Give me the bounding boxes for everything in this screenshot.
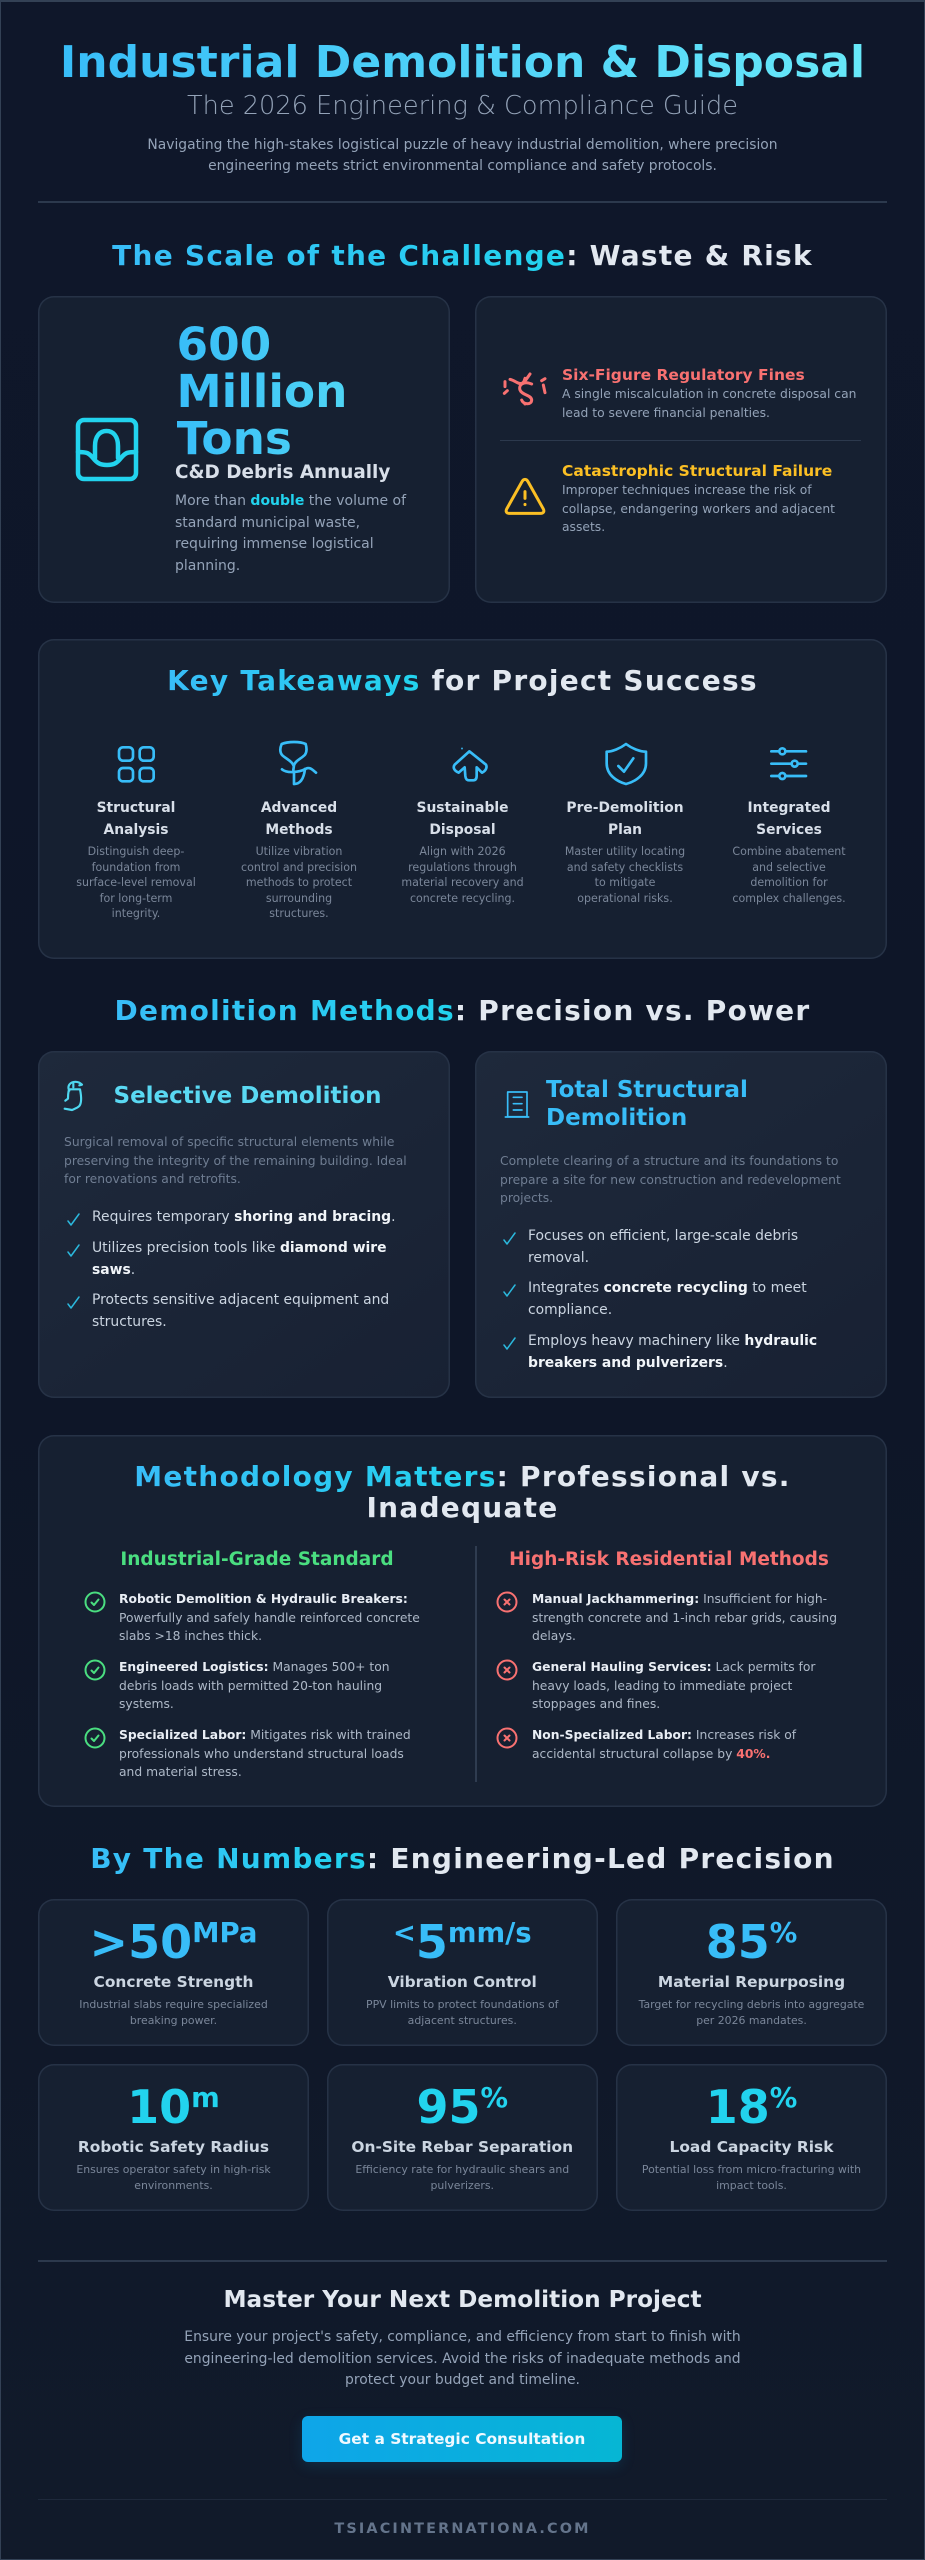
takeaway: advanced methods: control and precision [241, 861, 357, 874]
takeaway: structural analysis [76, 800, 196, 920]
takeaway: integrated services: demolition for [750, 876, 828, 889]
big number: Tons [176, 412, 292, 464]
icon: advanced tool [278, 740, 318, 786]
panel: debris statistic [38, 296, 450, 603]
takeaway: pre-demolition plan: to mitigate [595, 876, 655, 889]
big number: 600 [176, 318, 271, 370]
check list: total: removal. [528, 1250, 589, 1266]
comparison: engineered logistics [84, 1660, 390, 1711]
stat note: adjacent structures. [408, 2014, 517, 2026]
risk: regulatory fines: Six-Figure Regulatory Fines [562, 366, 805, 384]
check list: total: Integrates concrete recycling to meet [528, 1280, 807, 1296]
comparison: manual jackhammering: Manual Jackhammering: Insufficient for high- [532, 1592, 827, 1606]
method description: total: prepare a site for new construction and redevelopment [500, 1172, 841, 1186]
method description: selective: preserving the integrity of the remaining building. Ideal [64, 1154, 407, 1168]
stat note [616, 2162, 887, 2193]
stat name: Load Capacity Risk [670, 2138, 833, 2156]
method description: selective: for renovations and retrofits. [64, 1172, 241, 1186]
stat value: <5mm/s [393, 1915, 532, 1969]
comparison: robotic demolition: Robotic Demolition & Hydraulic Breakers: [119, 1592, 408, 1606]
stat note: Ensures operator safety in high-risk [76, 2163, 271, 2176]
takeaway: sustainable disposal: regulations through [408, 861, 517, 874]
comparison: general hauling [496, 1660, 816, 1711]
icon: hand tool [64, 1080, 84, 1112]
stat note: pulverizers. [430, 2178, 494, 2192]
comparison: engineered logistics: Engineered Logistics: Manages 500+ ton [119, 1660, 390, 1674]
icon: sliders [770, 747, 808, 780]
stat card: rebar separation [327, 2064, 598, 2211]
comparison: robotic demolition: Powerfully and safely handle reinforced concrete [119, 1610, 420, 1624]
panel: total structural demolition [475, 1051, 887, 1398]
takeaway: pre-demolition plan [565, 800, 685, 905]
stat note: PPV limits to protect foundations of [366, 1998, 558, 2011]
takeaway: sustainable disposal [401, 800, 524, 905]
risk description: failure: assets. [562, 520, 605, 534]
stat value: 95% [416, 2080, 508, 2134]
method title: total [546, 1077, 748, 1131]
panel: selective demolition [38, 1051, 450, 1398]
takeaway: pre-demolition plan: Pre-Demolition [566, 800, 684, 816]
stat description: requiring immense logistical [175, 536, 374, 552]
takeaway: sustainable disposal: Disposal [429, 822, 496, 838]
stat description: More than double the volume of [175, 493, 406, 509]
panel: key takeaways [38, 639, 887, 959]
comparison: specialized labor: and material stress. [119, 1765, 242, 1779]
comparison: engineered logistics: systems. [119, 1697, 174, 1711]
risk description: fines [562, 387, 856, 420]
takeaway: sustainable disposal: concrete recycling. [410, 892, 515, 905]
stat note: environments. [134, 2178, 213, 2192]
takeaway: pre-demolition plan: Plan [608, 822, 642, 838]
comparison: non-specialized labor [496, 1728, 796, 1760]
intro text: Navigating the high-stakes logistical puzzle of heavy industrial demolition, where precision [147, 137, 778, 153]
intro text: engineering meets strict environmental compliance and safety protocols. [208, 158, 717, 174]
heading: methodology matters [134, 1460, 791, 1524]
stat value: 18% [706, 2080, 797, 2134]
check list: total: Employs heavy machinery like hydraulic [528, 1333, 817, 1349]
method description: selective [64, 1135, 407, 1186]
takeaway: pre-demolition plan: Master utility locating [565, 845, 685, 858]
call to action text: engineering-led demolition services. Avoid the risks of inadequate methods and [184, 2351, 741, 2367]
takeaway: pre-demolition plan: operational risks. [577, 892, 673, 905]
comparison: manual jackhammering [496, 1592, 837, 1643]
stat note [79, 1998, 268, 2026]
check list: selective: Requires temporary shoring and bracing. [92, 1209, 396, 1225]
panel: risks [475, 296, 887, 603]
comparison: manual jackhammering: delays. [532, 1629, 576, 1643]
title: Industrial Demolition & Disposal [60, 37, 865, 88]
stat note: per 2026 mandates. [696, 2014, 807, 2026]
risk description: failure: Improper techniques increase the risk of [562, 483, 812, 497]
comparison: engineered logistics: debris loads with permitted 20-ton hauling [119, 1678, 382, 1692]
takeaway: sustainable disposal: material recovery and [401, 876, 524, 889]
comparison: specialized labor [84, 1728, 411, 1779]
call to action text: Ensure your project's safety, compliance, and efficiency from start to finish with [184, 2329, 741, 2345]
stat note [616, 1997, 887, 2028]
stat card: robotic safety radius [38, 2064, 309, 2211]
icon: grid [118, 746, 155, 783]
stat note: impact tools. [716, 2178, 787, 2192]
stat note: breaking power. [130, 2014, 217, 2026]
stat description: standard municipal waste, [175, 515, 360, 531]
stat name: Concrete Strength [94, 1973, 253, 1991]
check list: total: breakers and pulverizers. [528, 1355, 728, 1371]
check list: total: compliance. [528, 1302, 612, 1318]
icon: fines [502, 372, 547, 406]
method description: total: projects. [500, 1191, 553, 1205]
takeaway: advanced methods: surrounding [266, 892, 332, 905]
takeaway: sustainable disposal: Align with 2026 [419, 845, 506, 858]
check list: total [503, 1228, 817, 1371]
comparison: non-specialized labor: Non-Specialized Labor: Increases risk of [532, 1728, 796, 1742]
takeaway: sustainable disposal: Sustainable [416, 800, 508, 816]
icon: debris container [76, 418, 138, 482]
risk description: fines: lead to severe financial penalties. [562, 406, 770, 420]
comparison: general hauling: stoppages and fines. [532, 1697, 660, 1711]
call to action text [0, 2327, 925, 2392]
button: strategic consultation [302, 2416, 622, 2462]
heading: by the numbers: By The Numbers: Engineering-Led Precision [90, 1842, 835, 1874]
heading: demolition methods: Demolition Methods: Precision vs. Power [114, 994, 810, 1027]
takeaway: advanced methods: structures. [269, 907, 329, 920]
takeaway: structural analysis: integrity. [112, 907, 160, 920]
stat name: Vibration Control [388, 1973, 537, 1991]
check list: selective: structures. [92, 1314, 167, 1330]
takeaway: structural analysis: for long-term [100, 892, 172, 905]
risk description: failure: collapse, endangering workers and adjacent [562, 502, 835, 516]
column title: high-risk: High-Risk Residential Methods [509, 1549, 829, 1570]
method title: selective: Selective Demolition [114, 1083, 382, 1109]
comparison: specialized labor: professionals who understand structural loads [119, 1746, 404, 1760]
icon: building [504, 1091, 530, 1118]
comparison: general hauling: heavy loads, leading to immediate project [532, 1678, 792, 1692]
big number: Million [176, 364, 347, 418]
stat description [175, 493, 406, 574]
heading: scale of the challenge: The Scale of the Challenge: Waste & Risk [112, 238, 813, 272]
takeaway: pre-demolition plan: and safety checklists [567, 861, 683, 874]
comparison: general hauling: General Hauling Services: Lack permits for [532, 1660, 815, 1674]
takeaway: integrated services: complex challenges. [732, 892, 846, 905]
risk: structural failure: Catastrophic Structural Failure [562, 462, 832, 480]
takeaway: advanced methods: methods to protect [246, 876, 352, 889]
stat value: 10m [127, 2080, 220, 2134]
method title: total: Demolition [546, 1105, 687, 1131]
risk description: failure [562, 483, 835, 534]
method description: total [500, 1154, 841, 1205]
stat note: Efficiency rate for hydraulic shears and [355, 2163, 569, 2176]
icon: warning triangle [504, 478, 546, 515]
check list: total: Focuses on efficient, large-scale debris [528, 1228, 798, 1244]
stat note [327, 1997, 598, 2028]
takeaway: structural analysis: Analysis [104, 822, 168, 838]
stat card: vibration control [327, 1899, 598, 2046]
footer website: TSIACINTERNATIONA.COM [334, 2521, 591, 2537]
stat card: material repurposing [616, 1899, 887, 2046]
call to action heading: Master Your Next Demolition Project [223, 2286, 702, 2313]
takeaway: integrated services: and selective [752, 861, 826, 874]
takeaway: advanced methods: Utilize vibration [256, 845, 342, 858]
takeaway: integrated services: Integrated [747, 800, 830, 816]
stat note [327, 2162, 598, 2193]
stat value: 85% [706, 1915, 797, 1969]
heading: methodology matters: Inadequate [366, 1491, 559, 1524]
comparison: specialized labor: Specialized Labor: Mitigates risk with trained [119, 1728, 411, 1742]
stat description: planning. [175, 558, 240, 574]
call to action text: protect your budget and timeline. [345, 2372, 580, 2388]
stat card: load capacity risk [616, 2064, 887, 2211]
method description: selective: Surgical removal of specific structural elements while [64, 1135, 394, 1149]
takeaway: integrated services: Services [756, 822, 822, 838]
comparison: robotic demolition: slabs >18 inches thick. [119, 1629, 262, 1643]
takeaway: advanced methods: Advanced [261, 800, 337, 816]
check list: selective: saws. [92, 1262, 135, 1278]
stat note: Industrial slabs require specialized [79, 1998, 268, 2011]
stat value: >50MPa [90, 1915, 257, 1969]
stat name: Material Repurposing [658, 1973, 845, 1991]
subtitle: The 2026 Engineering & Compliance Guide [187, 91, 738, 121]
stat name: Robotic Safety Radius [78, 2138, 269, 2156]
intro text [147, 137, 778, 174]
big number [176, 318, 347, 464]
stat name: On-Site Rebar Separation [351, 2138, 573, 2156]
takeaway: advanced methods: Methods [265, 822, 333, 838]
stat note: Potential loss from micro-fracturing with [642, 2163, 861, 2176]
button: strategic consultation: Get a Strategic Consultation [339, 2430, 585, 2448]
heading: methodology matters: Methodology Matters: Professional vs. [134, 1460, 791, 1493]
stat note [38, 2162, 309, 2193]
takeaway: structural analysis: foundation from [92, 861, 180, 874]
heading: key takeaways: Key Takeaways for Project Success [167, 664, 758, 697]
stat label: C&D Debris Annually [175, 462, 390, 483]
icon: recycling arrow [452, 748, 488, 782]
takeaway: structural analysis: Structural [97, 800, 175, 816]
method title: total: Total Structural [546, 1077, 748, 1103]
comparison: robotic demolition [84, 1592, 420, 1643]
stat note: Target for recycling debris into aggregate [639, 1998, 864, 2011]
risk description: fines: A single miscalculation in concrete disposal can [562, 387, 856, 401]
column title: industrial-grade: Industrial-Grade Standard [120, 1549, 394, 1570]
check list: selective: Protects sensitive adjacent equipment and [92, 1292, 389, 1308]
takeaway: integrated services [732, 800, 846, 905]
takeaway: advanced methods [241, 800, 357, 920]
check list: selective: Utilizes precision tools like diamond wire [92, 1240, 387, 1256]
check list: selective [67, 1209, 396, 1330]
panel: methodology matters [38, 1435, 887, 1807]
takeaway: structural analysis: surface-level removal [76, 876, 196, 889]
stat card: concrete strength [38, 1899, 309, 2046]
takeaway: structural analysis: Distinguish deep- [88, 845, 184, 858]
method description: total: Complete clearing of a structure and its foundations to [500, 1154, 838, 1168]
icon: shield [605, 742, 648, 786]
takeaway: integrated services: Combine abatement [732, 845, 846, 858]
comparison: non-specialized labor: accidental structural collapse by 40%. [532, 1746, 770, 1760]
comparison: manual jackhammering: strength concrete and 1-inch rebar grids, causing [532, 1610, 837, 1624]
